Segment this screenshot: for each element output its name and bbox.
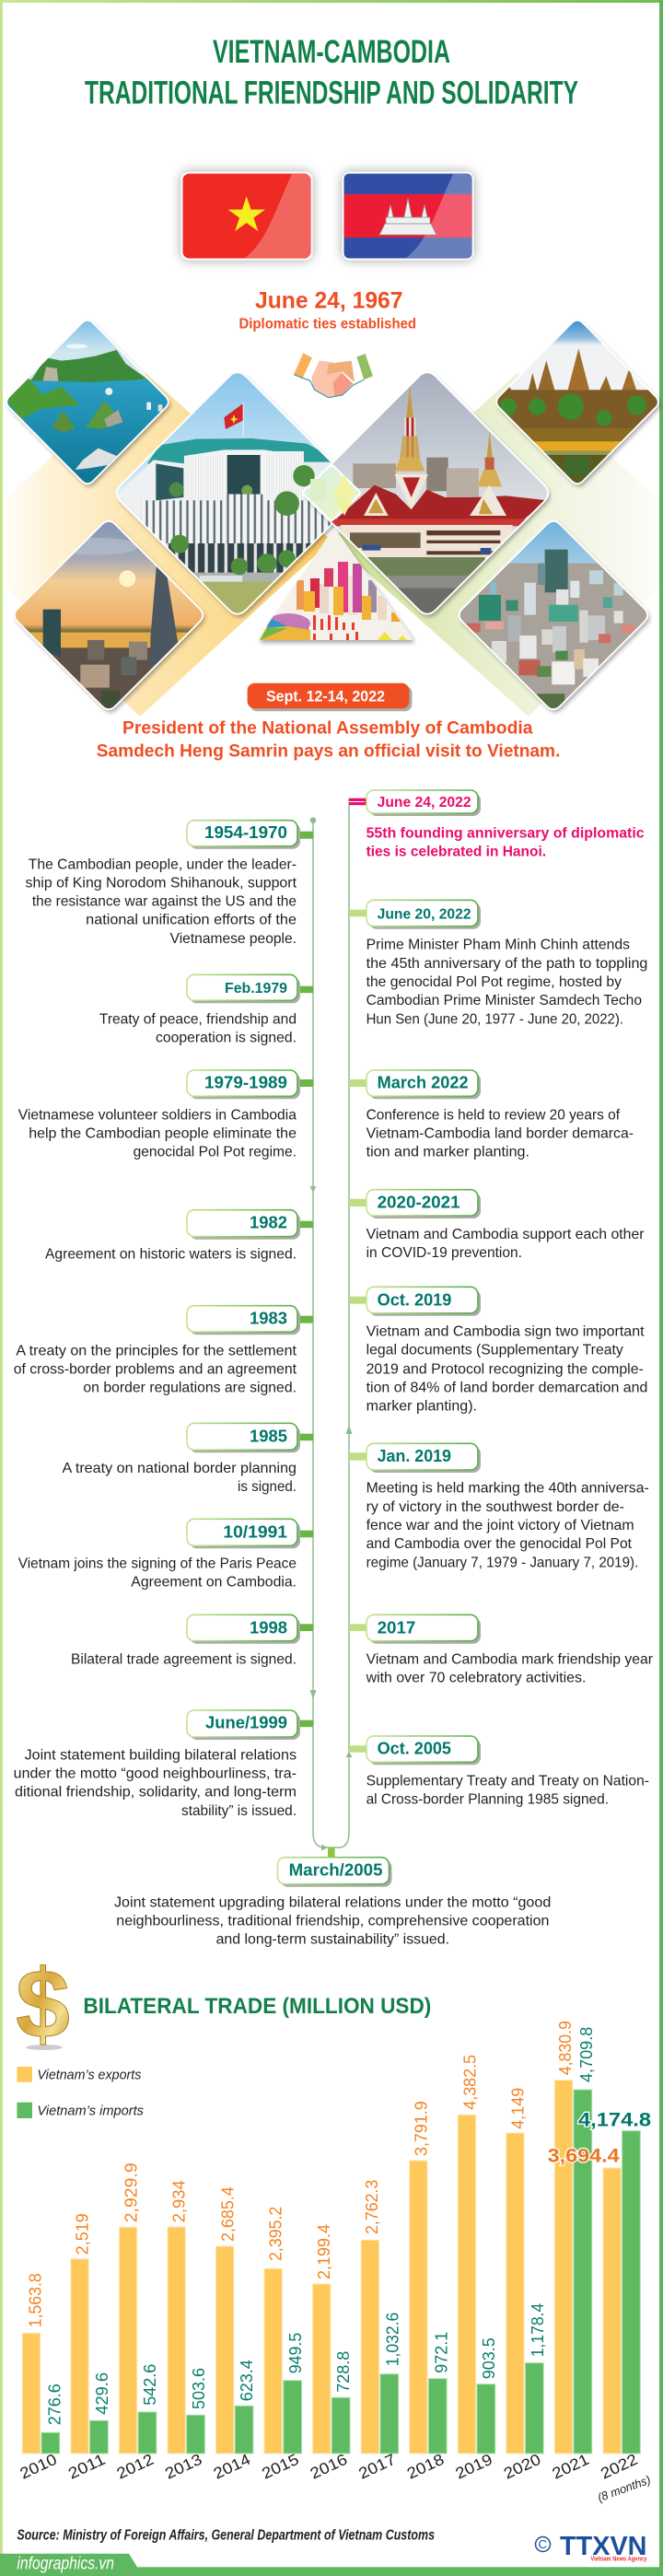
highlighted 2022 values: 3,694.4 xyxy=(548,2145,620,2166)
export value labels xyxy=(26,2021,575,2327)
timeline entry: Oct. 2019: Vietnam and Cambodia sign two important xyxy=(366,1324,645,1340)
timeline entry: March 2022: Vietnam-Cambodia land border demarca- xyxy=(366,1126,634,1142)
timeline rails xyxy=(309,798,352,1851)
timeline entry: Oct. 2005: Oct. 2005 xyxy=(378,1739,451,1758)
timeline entry: 1998: 1998 xyxy=(250,1617,287,1637)
timeline entry: June 20, 2022: June 20, 2022 xyxy=(378,907,471,923)
date pill: Sept. 12-14, 2022 xyxy=(248,683,413,711)
timeline entry: June 24, 2022: June 24, 2022 xyxy=(378,795,471,810)
source note: Source: Ministry of Foreign Affairs, General Department of Vietnam Customs xyxy=(17,2527,435,2543)
timeline entry: Oct. 2019: marker planting). xyxy=(366,1398,477,1414)
timeline entry: 1979-1989 xyxy=(18,1070,313,1160)
logo: TTXVN: Vietnam News Agency xyxy=(590,2555,647,2562)
timeline entry: 1998: Bilateral trade agreement is signed. xyxy=(71,1652,297,1668)
timeline entry: 2017: with over 70 celebratory activities. xyxy=(366,1671,586,1686)
timeline entry: 1954-1970: Vietnamese people. xyxy=(170,931,297,947)
timeline entry: Oct. 2019: legal documents (Supplementary Treaty xyxy=(366,1343,623,1358)
photo: Angkor Wat xyxy=(493,318,663,488)
photo: Phnom Penh cityscape xyxy=(456,516,654,714)
timeline entry: 1954-1970: national unification efforts of the xyxy=(86,913,297,928)
highlighted 2022 values: 4,174.8 xyxy=(578,2109,651,2130)
year axis labels: 2020 xyxy=(501,2451,543,2483)
export value labels: 2,519 xyxy=(72,2213,92,2255)
heading: bilateral trade: BILATERAL TRADE (MILLION USD) xyxy=(83,1994,431,2019)
timeline entry: Jan. 2019: regime (January 7, 1979 - January 7, 2019). xyxy=(366,1555,638,1570)
logo: TTXVN: C xyxy=(538,2537,547,2551)
timeline entry: Oct. 2005 xyxy=(349,1736,649,1807)
year axis labels: 2012 xyxy=(114,2451,157,2483)
photo: economic growth charts xyxy=(256,525,414,643)
timeline entry: Oct. 2019: 2019 and Protocol recognizing the comple- xyxy=(366,1361,644,1377)
date: June 24, 1967: June 24, 1967 xyxy=(255,287,403,313)
timeline entry: March 2022: tion and marker planting. xyxy=(366,1145,529,1160)
export value labels: 1,563.8 xyxy=(26,2273,44,2327)
timeline entry: Feb.1979: Treaty of peace, friendship and xyxy=(99,1012,297,1028)
timeline entry: June 24, 2022: 55th founding anniversary of diplomatic xyxy=(366,825,645,841)
timeline entry: Oct. 2019: Oct. 2019 xyxy=(378,1289,451,1309)
highlighted 2022 values xyxy=(548,2109,651,2166)
logo: TTXVN: TTXVN xyxy=(560,2532,646,2561)
timeline entry: March/2005: Joint statement upgrading bilateral relations under the motto “good xyxy=(114,1894,551,1910)
title: VIETNAM-CAMBODIA xyxy=(213,34,450,70)
legend xyxy=(17,2067,144,2119)
timeline entry: Oct. 2005: Supplementary Treaty and Treaty on Nation- xyxy=(366,1773,649,1789)
photo: Ho Chi Minh City at sunset xyxy=(9,516,207,714)
timeline entry: Jan. 2019: and Cambodia over the genocidal Pol Pot xyxy=(366,1536,633,1552)
legend: Vietnam’s exports xyxy=(37,2067,142,2082)
export value labels: 2,762.3 xyxy=(362,2180,381,2234)
timeline entry: 10/1991: Agreement on Cambodia. xyxy=(131,1575,297,1591)
import value labels: 728.8 xyxy=(333,2351,353,2393)
timeline entry: 1985: A treaty on national border planning xyxy=(63,1461,297,1476)
timeline entry: 1985: 1985 xyxy=(250,1426,287,1445)
import value labels: 429.6 xyxy=(92,2372,111,2415)
legend: Vietnam’s imports xyxy=(37,2104,144,2119)
timeline entry: 1954-1970 xyxy=(26,821,313,947)
timeline entry: Jan. 2019 xyxy=(349,1443,649,1570)
timeline entry: 1985 xyxy=(63,1423,313,1495)
timeline entry: June 24, 2022 xyxy=(349,790,645,859)
icon: handshake xyxy=(294,353,373,398)
timeline entry: June 20, 2022 xyxy=(349,900,647,1027)
timeline entry: Oct. 2019: tion of 84% of land border demarcation and xyxy=(366,1380,647,1395)
timeline entry: June 20, 2022: Prime Minister Pham Minh Chinh attends xyxy=(366,938,630,953)
export value labels: 4,382.5 xyxy=(460,2055,479,2110)
timeline entry: Jan. 2019: Meeting is held marking the 40th anniversa- xyxy=(366,1481,649,1497)
photo: Vietnam National Assembly building xyxy=(116,373,335,619)
timeline entry: 2020-2021: in COVID-19 prevention. xyxy=(366,1245,522,1261)
timeline entry: June 24, 2022: ties is celebrated in Hanoi. xyxy=(366,844,546,859)
bar chart: bilateral trade xyxy=(17,2021,652,2504)
export bars xyxy=(22,2081,621,2454)
import value labels: 542.6 xyxy=(140,2364,159,2406)
export value labels: 2,199.4 xyxy=(314,2224,333,2279)
date pill: Sept. 12-14, 2022: Sept. 12-14, 2022 xyxy=(266,688,385,705)
timeline entry: 1979-1989: 1979-1989 xyxy=(204,1072,287,1091)
year axis labels: 2017 xyxy=(356,2451,399,2483)
timeline entry: Feb.1979: cooperation is signed. xyxy=(156,1031,297,1046)
timeline entry: March/2005: and long-term sustainability” issued. xyxy=(216,1931,449,1947)
background bands behind photos xyxy=(0,373,663,717)
timeline entry: 1979-1989: Vietnamese volunteer soldiers in Cambodia xyxy=(18,1107,297,1123)
export value labels: 2,929.9 xyxy=(121,2162,140,2222)
headline: official visit xyxy=(97,718,560,762)
timeline entry: June/1999: June/1999 xyxy=(205,1713,287,1732)
timeline entry: 2017: Vietnam and Cambodia mark friendship year xyxy=(366,1652,654,1668)
temple emblem xyxy=(379,198,436,235)
import value labels: 623.4 xyxy=(237,2360,256,2401)
export value labels: 4,830.9 xyxy=(555,2021,575,2075)
timeline entry: 1982: Agreement on historic waters is signed. xyxy=(45,1247,297,1263)
photo: Ha Long Bay xyxy=(0,313,175,490)
timeline entry: Feb.1979: Feb.1979 xyxy=(225,981,287,997)
timeline entry: Jan. 2019: ry of victory in the southwest border de- xyxy=(366,1499,624,1515)
import value labels: 4,709.8 xyxy=(576,2027,596,2082)
icon: gold dollar sign: $ xyxy=(16,1950,70,2058)
year axis labels: 2013 xyxy=(162,2451,204,2483)
import value labels: 1,178.4 xyxy=(528,2303,547,2357)
timeline entry: 1979-1989: genocidal Pol Pot regime. xyxy=(134,1145,297,1160)
export value labels: 2,934 xyxy=(169,2180,189,2222)
timeline entry: June 20, 2022: the genocidal Pol Pot regime, hosted by xyxy=(366,974,622,990)
timeline entry: 1998 xyxy=(71,1614,313,1668)
timeline entry: June 20, 2022: Hun Sen (June 20, 1977 - June 20, 2022). xyxy=(366,1011,623,1027)
flag: Vietnam xyxy=(182,173,311,260)
import value labels: 903.5 xyxy=(479,2337,498,2379)
year axis labels: 2019 xyxy=(453,2451,495,2483)
timeline entry: March 2022: March 2022 xyxy=(378,1072,469,1091)
timeline entry: June/1999: stability” is issued. xyxy=(181,1803,297,1819)
export value labels: 3,791.9 xyxy=(412,2101,431,2156)
timeline entry: 2020-2021: 2020-2021 xyxy=(378,1192,460,1211)
year axis labels: 2011 xyxy=(65,2451,108,2483)
timeline entry: Jan. 2019: Jan. 2019 xyxy=(378,1446,451,1465)
date: June 24, 1967: Diplomatic ties established xyxy=(239,317,416,332)
timeline entry: March 2022 xyxy=(349,1070,634,1160)
timeline entry: June 20, 2022: Cambodian Prime Minister Samdech Techo xyxy=(366,993,642,1008)
timeline entry: 2017: 2017 xyxy=(378,1617,415,1637)
import value labels: 972.1 xyxy=(431,2332,450,2373)
year axis labels: 2022 xyxy=(598,2451,640,2483)
small centre diamond xyxy=(303,465,360,520)
timeline entry: 10/1991 xyxy=(18,1519,313,1591)
timeline entry: March/2005 xyxy=(114,1847,551,1947)
import value labels: 503.6 xyxy=(189,2368,208,2409)
year axis labels: 2016 xyxy=(308,2451,350,2483)
timeline entry: Feb.1979 xyxy=(99,974,313,1046)
year axis labels: 2021 xyxy=(550,2451,592,2483)
timeline entry: 2020-2021: Vietnam and Cambodia support each other xyxy=(366,1227,645,1242)
flag: Cambodia xyxy=(343,173,473,260)
footer tab: infographics.vn: infographics.vn xyxy=(17,2555,114,2573)
timeline entry: 2020-2021 xyxy=(349,1190,645,1261)
timeline entry: 1979-1989: help the Cambodian people eliminate the xyxy=(29,1126,297,1142)
timeline entry: 1983: A treaty on the principles for the settlement xyxy=(16,1343,297,1358)
title xyxy=(85,34,578,111)
headline: official visit: President of the National Assembly of Cambodia xyxy=(122,718,533,739)
export value labels: 2,395.2 xyxy=(265,2207,285,2261)
timeline entry: June/1999: ditional friendship, solidarity, and long-term xyxy=(15,1785,297,1801)
timeline entry: 1985: is signed. xyxy=(238,1479,297,1495)
export value labels: 4,149 xyxy=(507,2088,527,2129)
timeline entry: 1954-1970: ship of King Norodom Shihanouk, support xyxy=(26,875,297,891)
timeline entry: Oct. 2019 xyxy=(349,1287,647,1414)
timeline entry: 1982: 1982 xyxy=(250,1213,287,1232)
date: June 24, 1967 xyxy=(239,287,416,332)
timeline entry: 1954-1970: the resistance war against the US and the xyxy=(32,894,297,910)
import value labels: 949.5 xyxy=(285,2333,305,2373)
import value labels: 1,032.6 xyxy=(383,2313,401,2366)
timeline entry: June/1999: Joint statement building bilateral relations xyxy=(25,1747,297,1763)
year axis labels: (8 months) xyxy=(596,2473,652,2504)
timeline entry: 1982 xyxy=(45,1210,313,1263)
timeline entry: 1983: of cross-border problems and an agreement xyxy=(14,1361,297,1377)
import bars xyxy=(41,2090,640,2454)
timeline entry: 1983: 1983 xyxy=(250,1308,287,1327)
headline: official visit: Samdech Heng Samrin pays an official visit to Vietnam. xyxy=(97,741,560,762)
timeline entry: March/2005: neighbourliness, traditional friendship, comprehensive cooperation xyxy=(116,1913,549,1929)
timeline entry: 1983 xyxy=(14,1306,313,1395)
timeline entry: 10/1991: Vietnam joins the signing of the Paris Peace xyxy=(18,1556,297,1572)
timeline entry: March/2005: March/2005 xyxy=(289,1860,383,1880)
timeline entry: 10/1991: 10/1991 xyxy=(223,1521,287,1541)
import value labels: 276.6 xyxy=(45,2384,64,2425)
year axis labels: 2018 xyxy=(404,2451,447,2483)
timeline entry: 2017 xyxy=(349,1614,654,1686)
timeline entry: June 20, 2022: the 45th anniversary of the path to toppling xyxy=(366,956,647,972)
timeline entry: March 2022: Conference is held to review 20 years of xyxy=(366,1107,621,1123)
photo: Cambodian National Assembly palace xyxy=(299,368,552,622)
year axis labels: 2015 xyxy=(259,2451,301,2483)
import value labels xyxy=(45,2027,596,2425)
timeline entry: June/1999: under the motto “good neighbourliness, tra- xyxy=(14,1766,297,1782)
year axis labels: 2010 xyxy=(17,2451,60,2483)
year axis labels: 2014 xyxy=(211,2451,253,2483)
timeline entry: 1983: on border regulations are signed. xyxy=(83,1380,297,1395)
timeline entry: Jan. 2019: fence war and the joint victory of Vietnam xyxy=(366,1518,634,1533)
timeline entry: 1954-1970: The Cambodian people, under the leader- xyxy=(29,857,297,872)
export value labels: 2,685.4 xyxy=(217,2186,237,2242)
year axis labels xyxy=(17,2451,652,2504)
timeline entry: 1954-1970: 1954-1970 xyxy=(204,822,287,842)
timeline entry: Oct. 2005: al Cross-border Planning 1985 signed. xyxy=(366,1791,609,1807)
timeline entry: June/1999 xyxy=(14,1710,313,1819)
